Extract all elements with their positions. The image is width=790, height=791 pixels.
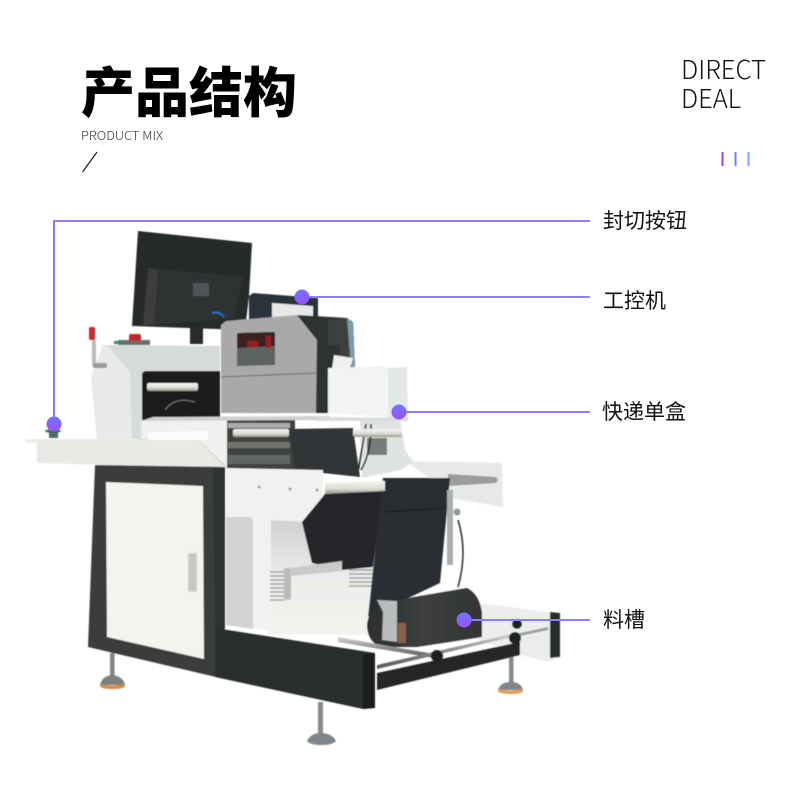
hanging black film <box>302 490 383 570</box>
callout: material trough: 料槽 <box>603 604 645 634</box>
sealing button <box>45 429 61 438</box>
subtitle: PRODUCT MIX <box>81 127 164 144</box>
mid section: interior <box>227 420 413 478</box>
callout: sealing button <box>46 205 687 432</box>
upper film roller <box>325 481 385 494</box>
callout: waybill box <box>392 396 686 426</box>
bag roll in trough <box>367 588 482 647</box>
foot: right <box>498 655 523 694</box>
express waybill box <box>328 366 408 418</box>
handle <box>89 327 107 368</box>
upper rollers <box>233 429 402 437</box>
cabinet <box>88 465 225 677</box>
vents <box>270 570 375 600</box>
left housing <box>91 334 220 440</box>
title: 产品结构 <box>81 49 297 128</box>
foot: centre <box>307 702 336 745</box>
callout: industrial computer <box>294 285 666 315</box>
central panel <box>226 468 380 635</box>
knobs <box>431 619 522 662</box>
industrial computer <box>249 293 318 322</box>
trough rods <box>338 627 548 669</box>
corner text: DEAL <box>681 79 741 116</box>
foot: left <box>100 653 125 689</box>
machine photo illustration <box>25 231 560 745</box>
trough front bar <box>215 628 375 709</box>
trough black roller <box>377 642 520 690</box>
corner text: DIRECT <box>681 50 766 87</box>
callout: material trough <box>456 604 645 634</box>
door handle <box>188 553 197 592</box>
lower roller <box>284 561 342 600</box>
table top <box>25 416 408 468</box>
callout: industrial computer: 工控机 <box>603 285 666 315</box>
upper bag film <box>288 428 360 477</box>
callout: waybill box: 快递单盒 <box>602 396 686 426</box>
slash mark <box>82 152 97 172</box>
trough right bracket <box>478 603 560 662</box>
printer <box>221 315 355 413</box>
monitor <box>132 231 252 344</box>
lower right tray <box>405 461 503 507</box>
three tick marks <box>722 152 748 166</box>
valve and cable <box>447 490 463 587</box>
main black film <box>368 478 450 617</box>
callout: sealing button: 封切按钮 <box>603 205 687 235</box>
cabinet door <box>106 482 204 659</box>
corner text <box>681 50 766 116</box>
